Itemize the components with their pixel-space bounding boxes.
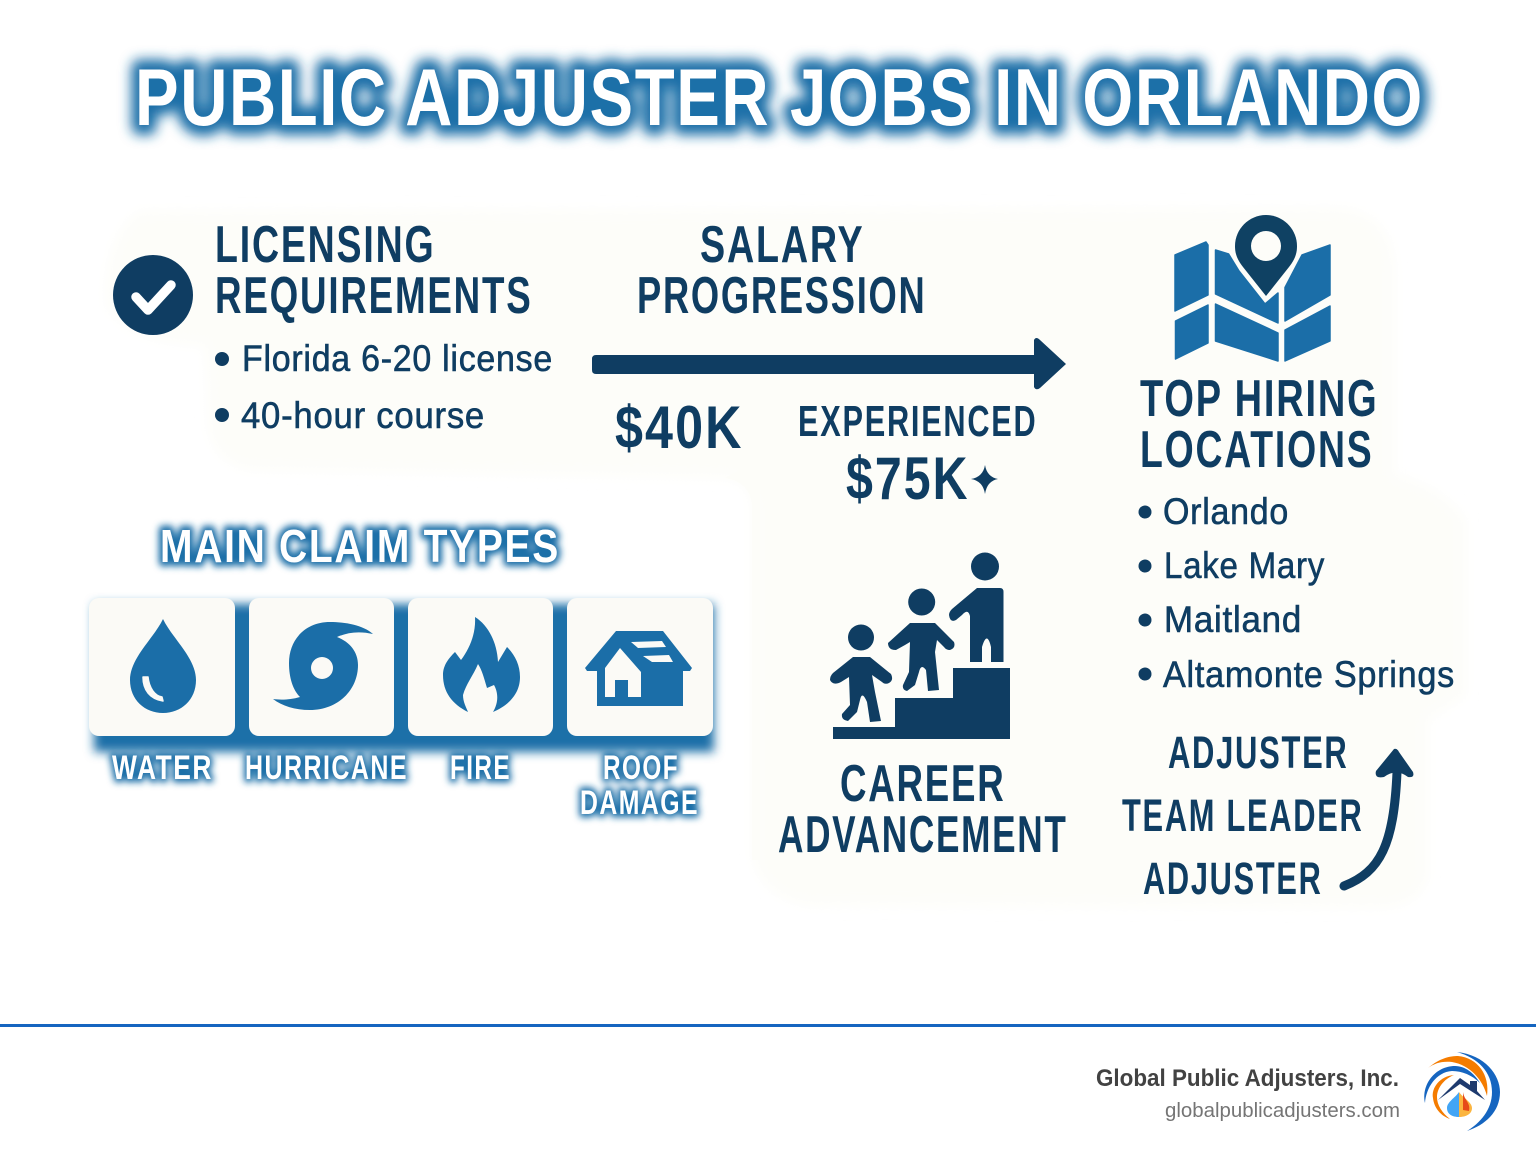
heading: salary progression [637,216,926,325]
salary experienced figure: $75K [846,445,970,512]
claim labels: HURRICANE [245,749,408,787]
claim labels: HURRICANE [245,749,408,787]
licensing bullet list [215,338,553,436]
claim labels: WATER [112,749,213,787]
icon: company logo [1424,1052,1500,1131]
icon: check badge [113,255,193,335]
arrow: career up [1344,749,1413,886]
ladder titles: ADJUSTER [1168,727,1348,778]
locations bullet list [1138,491,1455,695]
panel: career advancement [778,552,1068,864]
claim labels: ROOF [603,749,679,787]
card: fire [408,598,553,736]
company name: Global Public Adjusters, Inc. [1096,1065,1399,1092]
heading: licensing requirements: REQUIREMENTS [215,267,532,325]
claim labels: DAMAGE [580,784,699,822]
card: water [89,598,235,736]
licensing bullet list: 40-hour course [241,395,485,436]
heading: career advancement: CAREER [840,755,1006,813]
footer divider [0,1024,1536,1027]
claim labels: WATER [112,749,213,787]
heading: main claim types: MAIN CLAIM TYPES [160,520,560,572]
heading: main claim types: MAIN CLAIM TYPES [160,520,560,572]
salary experienced figure [798,397,1038,512]
heading: top hiring locations [1140,370,1378,479]
blue band behind cards [94,604,714,752]
heading: top hiring locations: TOP HIRING [1140,370,1378,428]
locations bullet list: Altamonte Springs [1163,654,1455,695]
panel: main claim types [89,520,714,822]
panel: career ladder [1122,727,1413,904]
claim labels: FIRE [450,749,511,787]
card: roof damage [567,598,713,736]
claim labels: ROOF [603,749,679,787]
claim labels: FIRE [450,749,511,787]
heading: licensing requirements [215,216,532,325]
company website: globalpublicadjusters.com [1165,1100,1400,1122]
icon: hurricane [273,622,373,710]
ladder titles [1122,727,1364,904]
locations bullet list: Orlando [1163,491,1289,532]
icon: water drop [130,619,196,713]
heading: top hiring locations: LOCATIONS [1140,421,1374,479]
icon: damaged roof house [585,631,692,706]
arrow: salary growth [592,338,1066,389]
panel: top hiring locations [1138,215,1455,695]
claim labels [112,749,699,822]
locations bullet list: Maitland [1164,599,1302,640]
panel: licensing requirements [113,216,553,436]
claim labels: DAMAGE [580,784,699,822]
heading: career advancement [778,755,1068,864]
icon: flame [443,617,520,712]
locations bullet list: Lake Mary [1164,545,1325,586]
card: hurricane [249,598,394,736]
salary experienced figure: EXPERIENCED [798,397,1038,446]
heading: licensing requirements: LICENSING [215,216,436,274]
ladder titles: TEAM LEADER [1122,790,1364,841]
heading: salary progression: SALARY [700,216,864,274]
footer branding [1096,1052,1500,1131]
licensing bullet list: Florida 6-20 license [242,338,553,379]
icon: people climbing stairs [830,552,1010,739]
heading: career advancement: ADVANCEMENT [778,806,1068,864]
salary entry figure: $40K [615,394,744,461]
heading: salary progression: PROGRESSION [637,267,926,325]
panel: salary progression [592,216,1066,512]
icon: map with pin [1175,215,1330,361]
ladder titles: ADJUSTER [1143,853,1322,904]
